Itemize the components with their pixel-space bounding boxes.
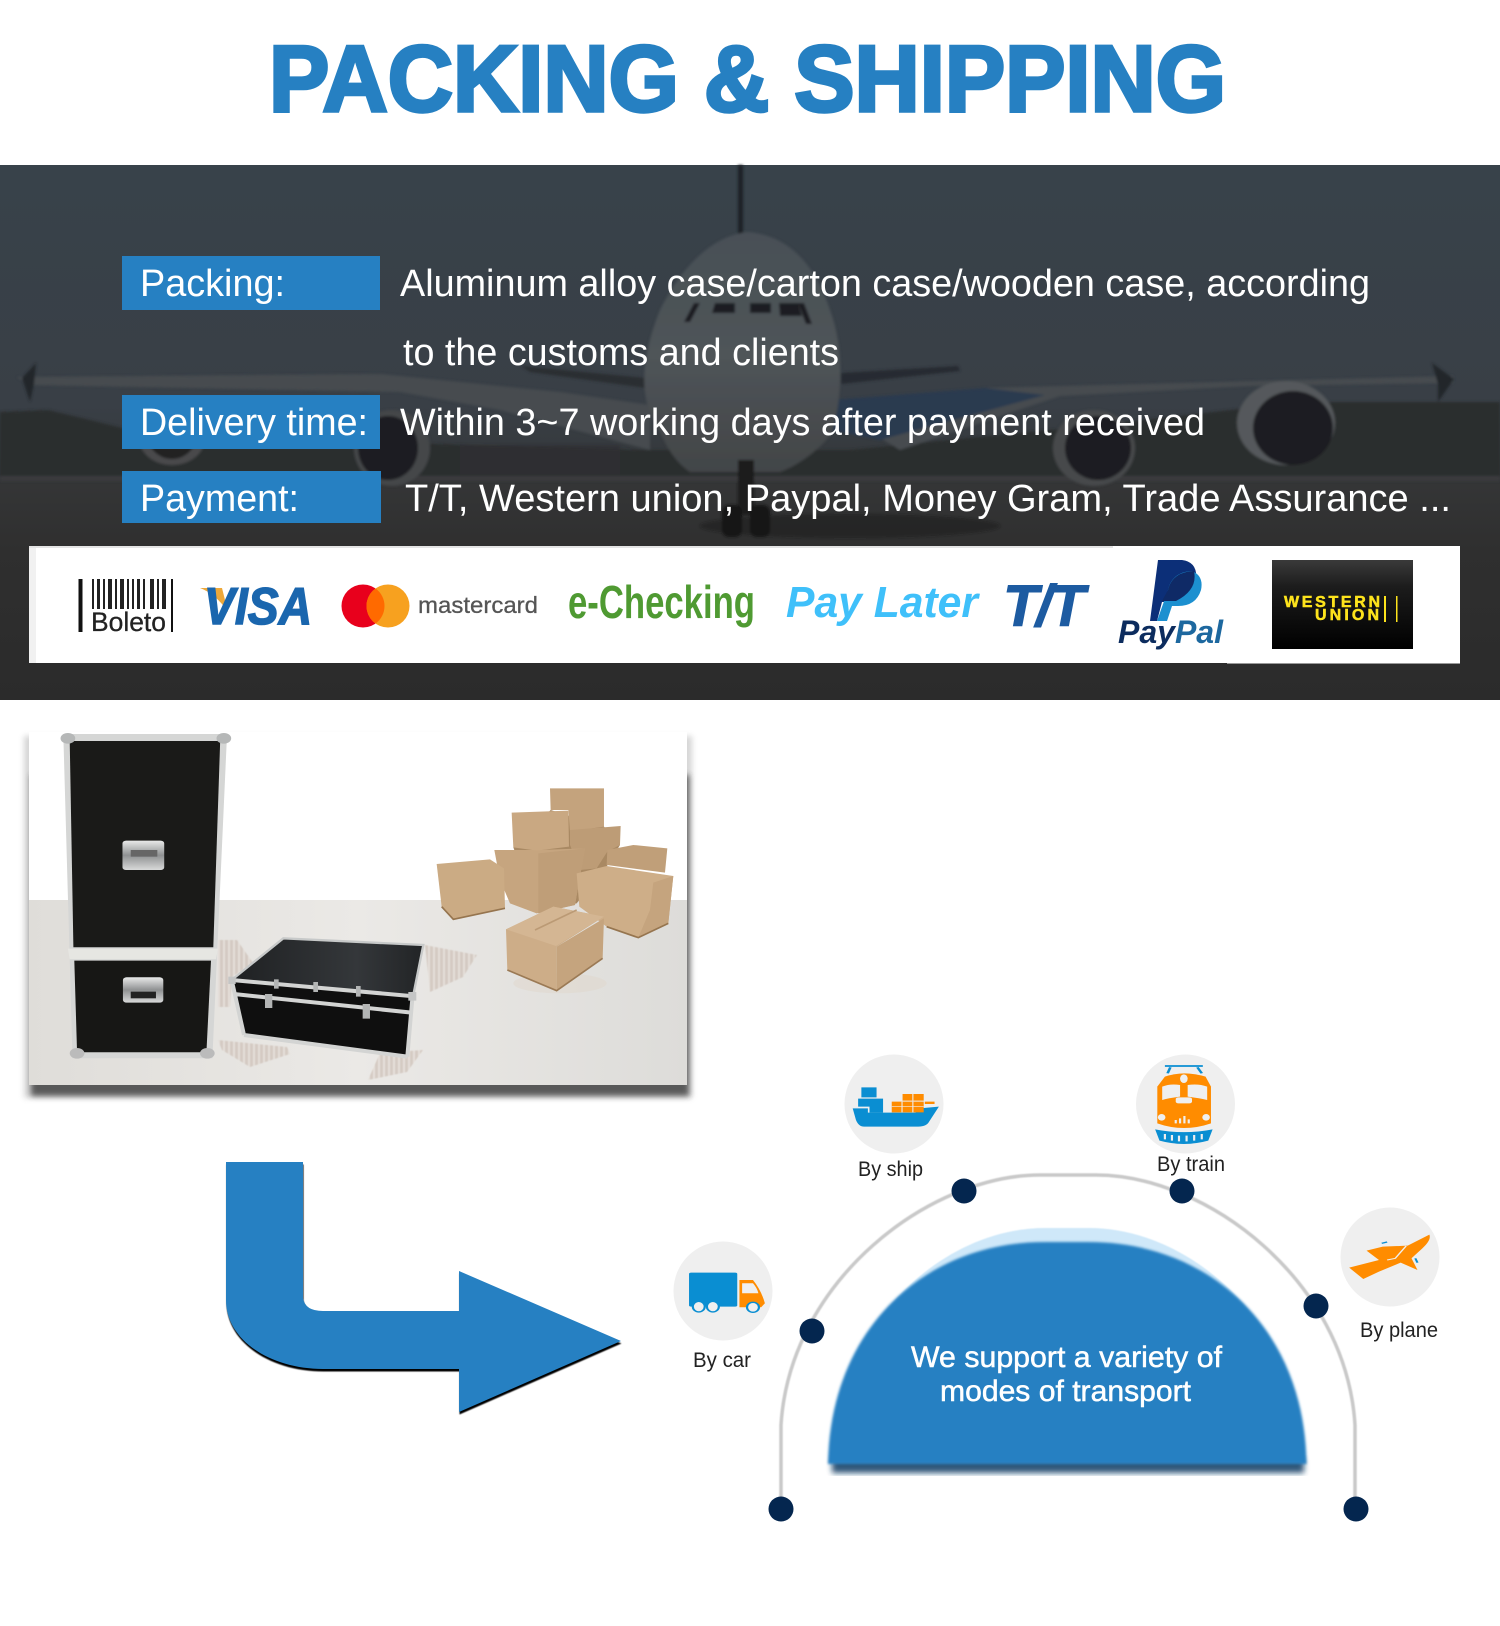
label: Packing [122,256,380,310]
logo: e-Checking: e-Checking [568,576,755,628]
panel: payment logos strip [29,546,1460,664]
arrow [226,1162,622,1414]
logo: Boleto [78,579,173,637]
logo: Western Union: UNION [1315,607,1379,624]
text: packing description: Aluminum alloy case/carton case/wooden case, according [400,263,1370,305]
text: delivery description: Within 3~7 working days after payment received [400,402,1205,444]
logo: Western Union: WESTERN [1284,594,1380,611]
logo: Boleto: Boleto [91,607,166,637]
logo: Mastercard: mastercard [418,592,538,618]
label: Delivery time: Delivery time: [140,402,368,444]
icon: by ship [844,1054,944,1154]
dome: transport message: We support a variety of [911,1341,1223,1374]
tall flight case [61,733,231,1059]
logo: T/T: T/T [1003,574,1090,639]
label: Payment [122,471,381,523]
label: by train: By train [1157,1153,1225,1176]
logo: Western Union [1272,560,1413,649]
logo: Mastercard [342,584,538,628]
arc with dots [768,1175,1368,1522]
logo: Pay Later: Pay Later [786,578,981,627]
label: by car: By car [693,1349,751,1372]
icon: by car [674,1242,772,1340]
label: by ship: By ship [858,1158,923,1181]
logo: Visa: VISA [204,578,312,636]
label: Packing: Packing: [140,263,285,305]
logo: PayPal: PayPal [1118,614,1224,650]
label: Delivery time [122,395,380,449]
map dots on floor [218,940,477,1080]
logo: PayPal [1118,560,1224,650]
icon: by plane [1340,1208,1440,1306]
dome: transport message: modes of transport [940,1375,1192,1408]
text: payment description: T/T, Western union, Paypal, Money Gram, Trade Assurance ... [405,478,1451,520]
label: Payment: Payment: [140,478,299,520]
title: PACKING & SHIPPING [269,26,1226,131]
label: by plane: By plane [1360,1319,1438,1342]
text: packing description [400,263,1370,374]
panel: airplane background [0,165,1500,700]
airplane photo [0,165,1500,538]
text: packing description: to the customs and clients [403,332,839,374]
dome: transport message [828,1228,1306,1473]
flat flight case [228,938,423,1057]
photo: flight cases and cartons [24,732,692,1098]
icon: by train [1136,1054,1235,1154]
carton boxes [437,788,673,993]
